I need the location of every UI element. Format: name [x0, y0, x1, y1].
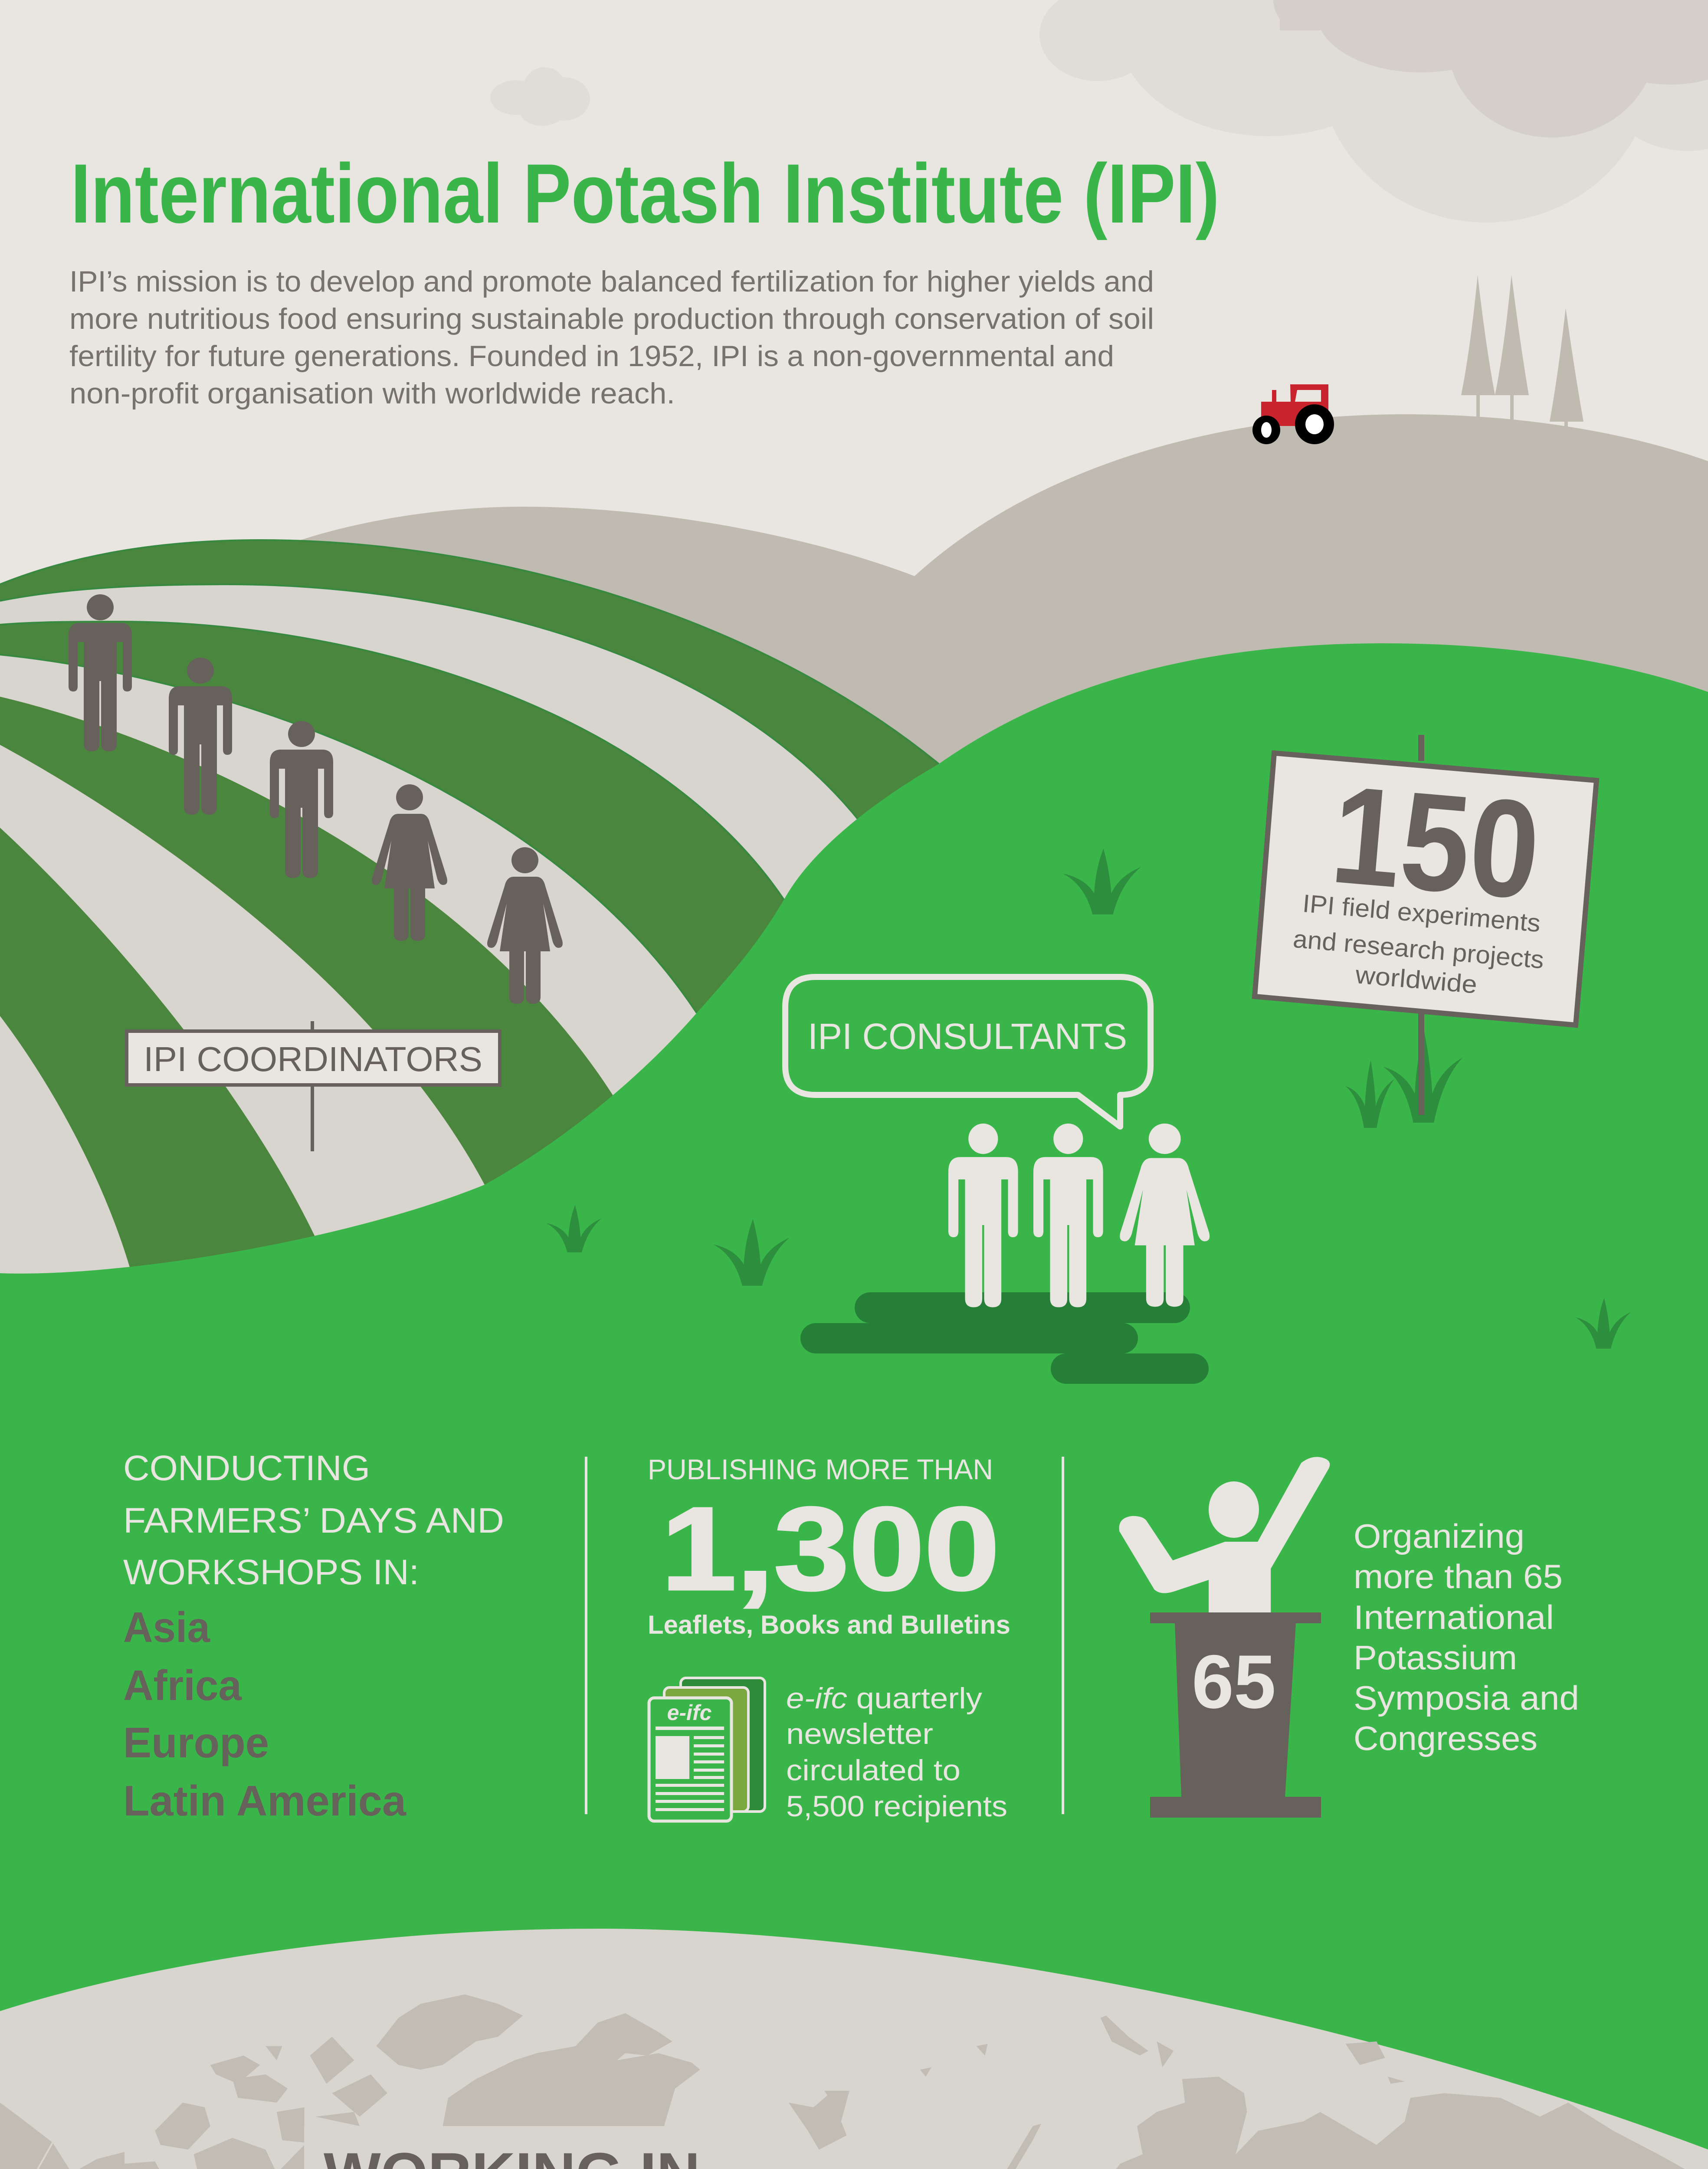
column: farmers' days: Africa — [123, 1661, 242, 1709]
north america and arctic — [0, 1995, 896, 2169]
icon: newsletter stack: e-ifc — [667, 1700, 712, 1725]
intro text: non-profit organisation with worldwide reach. — [69, 377, 675, 410]
newsletter text: circulated to — [786, 1754, 961, 1787]
column: farmers' days: WORKSHOPS IN: — [123, 1553, 419, 1592]
column: farmers' days: FARMERS’ DAYS AND — [123, 1501, 504, 1540]
column: farmers' days: Asia — [123, 1603, 210, 1651]
IPI coordinators figures — [69, 594, 563, 1004]
man 1 — [69, 594, 132, 751]
sign: 150 field experiments: 150 — [1326, 756, 1545, 928]
column: farmers' days — [123, 1448, 504, 1825]
newsletter text: e-ifc quarterly — [786, 1682, 982, 1715]
man 3 — [270, 721, 333, 878]
symposia text: Symposia and — [1354, 1679, 1579, 1717]
title: International Potash Institute (IPI) — [71, 147, 1220, 241]
column: farmers' days: CONDUCTING — [123, 1448, 370, 1488]
consultant woman — [1120, 1124, 1210, 1307]
clouds — [490, 0, 1708, 223]
sign: 150 field experiments: worldwide — [1354, 960, 1478, 999]
sign: 150 field experiments: IPI field experiments — [1301, 889, 1541, 937]
map background — [0, 1929, 1708, 2169]
consultant man 1 — [948, 1124, 1018, 1307]
trees — [1461, 275, 1583, 430]
IPI consultants speech bubble: IPI CONSULTANTS — [808, 1016, 1127, 1057]
eurasia — [824, 2015, 1692, 2169]
column: publishing: Leaflets, Books and Bulletins — [648, 1610, 1010, 1639]
symposia text: Potassium — [1354, 1638, 1517, 1677]
man 2 — [169, 658, 232, 815]
sign: IPI coordinators — [127, 1021, 500, 1151]
symposia text: Organizing — [1354, 1517, 1524, 1555]
striped field — [0, 540, 939, 1301]
column dividers — [585, 1457, 1064, 1814]
icon: newsletter stack — [649, 1678, 765, 1821]
sign: 150 field experiments — [1255, 735, 1597, 1115]
intro text: fertility for future generations. Founded in 1952, IPI is a non-governmental and — [69, 340, 1114, 373]
newsletter text — [786, 1682, 1007, 1823]
intro text — [69, 265, 1154, 410]
IPI consultants speech bubble — [785, 977, 1151, 1127]
large dark cloud — [1273, 0, 1708, 138]
green hill and field — [0, 643, 1708, 2169]
grass tufts — [546, 849, 1631, 1349]
world map — [0, 1995, 1692, 2169]
woman 2 — [487, 847, 563, 1004]
column: publishing — [648, 1453, 1010, 1823]
newsletter text: 5,500 recipients — [786, 1790, 1007, 1823]
icon: speaker at podium — [1119, 1457, 1330, 1818]
symposia text — [1354, 1517, 1579, 1757]
IPI consultants figures — [948, 1124, 1210, 1307]
icon: speaker at podium: 65 — [1192, 1640, 1276, 1724]
ground patches — [800, 1292, 1209, 1384]
column: publishing: PUBLISHING MORE THAN — [648, 1453, 993, 1485]
icon: tractor — [1252, 384, 1334, 444]
sign: IPI coordinators: IPI COORDINATORS — [144, 1040, 482, 1078]
sign: 150 field experiments: and research projects — [1292, 925, 1545, 974]
intro text: more nutritious food ensuring sustainable production through conservation of soil — [69, 302, 1154, 335]
map borders — [0, 2143, 1636, 2169]
heading clear zones — [201, 2126, 760, 2169]
intro text: IPI’s mission is to develop and promote balanced fertilization for higher yields and — [69, 265, 1154, 298]
consultant man 2 — [1033, 1124, 1103, 1307]
left hill — [217, 507, 998, 1041]
column: farmers' days: Europe — [123, 1719, 269, 1766]
column: publishing: 1,300 — [661, 1483, 1000, 1615]
column: symposia — [1119, 1457, 1579, 1818]
woman 1 — [372, 784, 447, 941]
newsletter text: newsletter — [786, 1717, 933, 1750]
small cloud — [490, 67, 590, 126]
symposia text: Congresses — [1354, 1719, 1538, 1757]
large light cloud — [1039, 0, 1708, 223]
right hill — [868, 414, 1708, 1041]
symposia text: more than 65 — [1354, 1557, 1563, 1596]
hills — [217, 414, 1708, 1041]
column: farmers' days: Latin America — [123, 1777, 407, 1825]
symposia text: International — [1354, 1598, 1554, 1636]
